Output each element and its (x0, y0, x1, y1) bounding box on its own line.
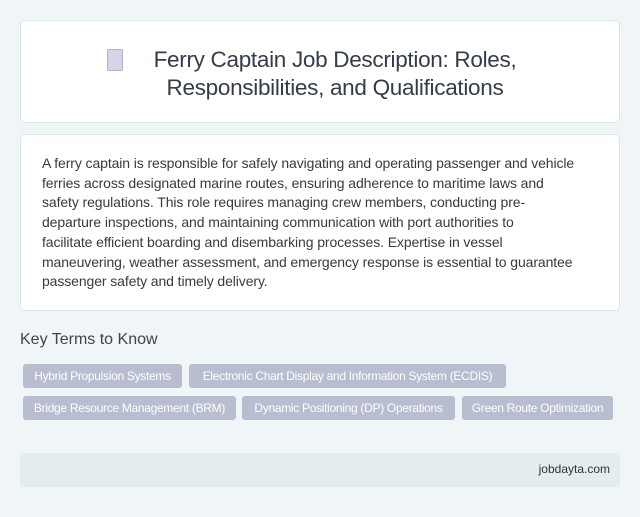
description text: safety regulations. This role requires managing crew members, conducting pre- (42, 194, 525, 210)
tag 2 (189, 364, 506, 388)
tag 5: Green Route Optimization (472, 401, 603, 415)
description text: facilitate efficient boarding and disembarking processes. Expertise in vessel (42, 234, 503, 250)
tag 4: Dynamic Positioning (DP) Operations (254, 401, 443, 415)
tag 2: Electronic Chart Display and Information System (ECDIS) (203, 369, 492, 383)
tag 3 (23, 396, 236, 420)
tag 4 (242, 396, 455, 420)
tag 1: Hybrid Propulsion Systems (34, 369, 171, 383)
footer (20, 453, 620, 487)
description card (20, 134, 620, 311)
description text: departure inspections, and maintaining communication with port authorities to (42, 214, 514, 230)
footer text: jobdayta.com (539, 462, 610, 476)
tag 5 (462, 396, 613, 420)
heading: key terms: Key Terms to Know (20, 331, 158, 348)
tag 3: Bridge Resource Management (BRM) (34, 401, 225, 415)
description text: A ferry captain is responsible for safely navigating and operating passenger and vehicle (42, 155, 574, 171)
description text (42, 155, 574, 289)
description text: ferries across designated marine routes, ensuring adherence to maritime laws and (42, 175, 544, 191)
header card (20, 20, 620, 123)
title: Ferry Captain Job Description: Roles, Responsibilities, and Qualifications (154, 47, 516, 100)
description text: passenger safety and timely delivery. (42, 273, 268, 289)
icon: document (107, 49, 123, 71)
tag 1 (23, 364, 182, 388)
description text: maneuvering, weather assessment, and emergency response is essential to guarantee (42, 254, 572, 270)
